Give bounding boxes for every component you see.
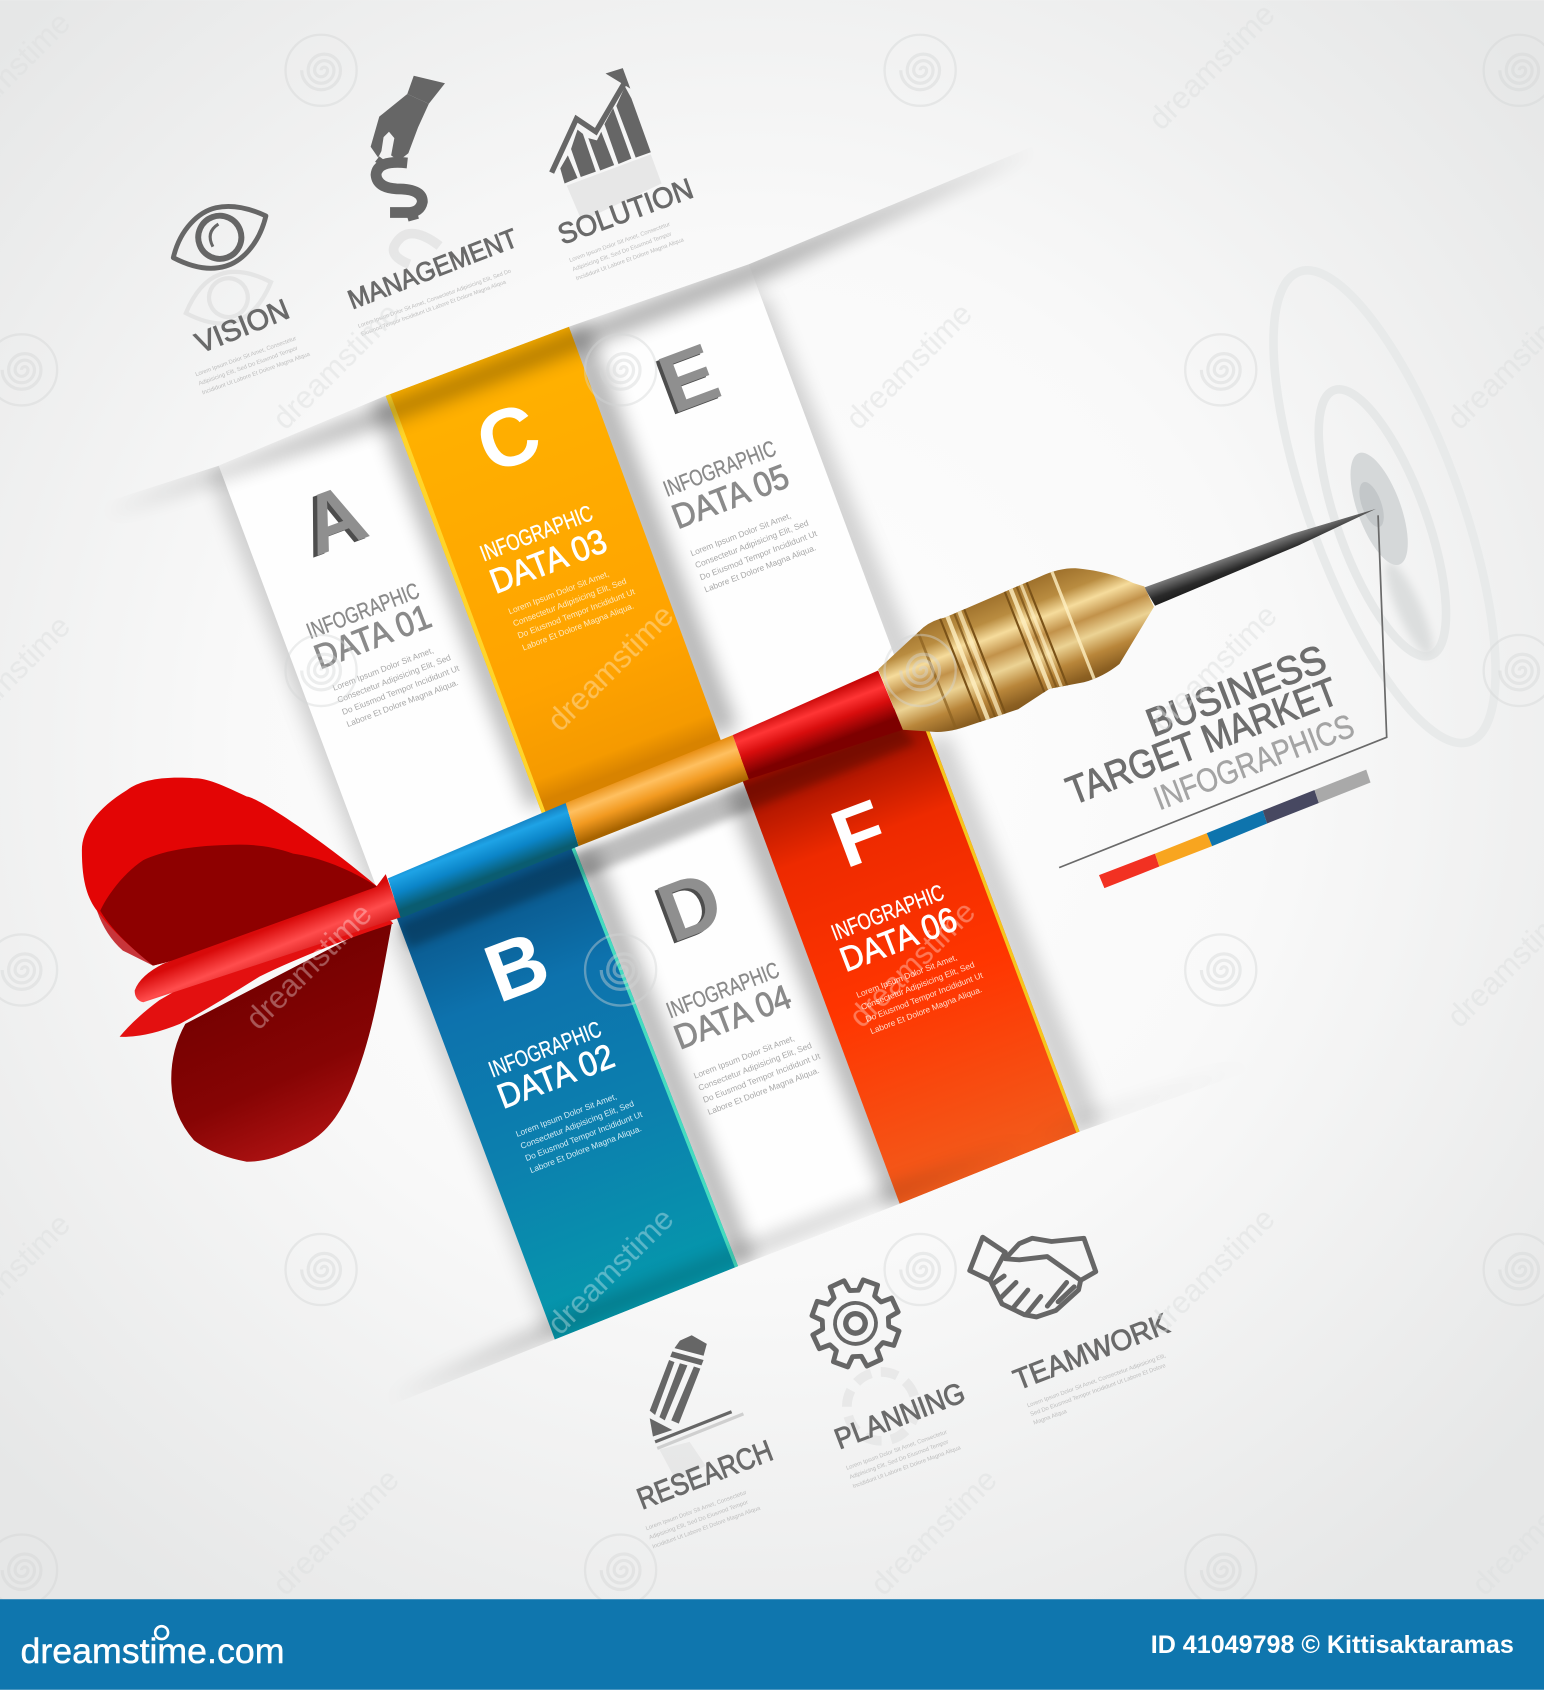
- gear reflection: [847, 1372, 916, 1441]
- strip A text: [285, 465, 466, 729]
- gold barrel: [878, 568, 1154, 732]
- watermark text on colour: dreamstime: [239, 896, 379, 1036]
- leader line to target: [1059, 515, 1387, 868]
- watermark text on colour: dreamstime: [540, 1201, 681, 1341]
- label: management: MANAGEMENT: [344, 223, 521, 315]
- body text: Labore Et Dolore Magna Aliqua.: [869, 984, 983, 1036]
- dart: [82, 509, 1376, 1162]
- body text: Labore Et Dolore Magna Aliqua.: [703, 542, 817, 594]
- heading: infographic data 02: DATA 02: [492, 1037, 620, 1116]
- label: vision: [191, 294, 312, 396]
- body text: Lorem Ipsum Dolor Sit Amet,: [855, 952, 959, 1000]
- shaft: red: [733, 670, 903, 779]
- caption: Lorem Ipsum Dolor Sit Amet, Consectetur Adipisicing Elit,: [1027, 1353, 1167, 1409]
- footer logo text: dreamstime.com: [20, 1631, 284, 1671]
- watermark text on background: dreamstime: [1144, 598, 1284, 738]
- strip B text: [473, 914, 649, 1175]
- watermark text on colour: [239, 598, 982, 1341]
- flight: back sliver: [97, 911, 183, 966]
- strip F text: [820, 783, 989, 1036]
- label: planning: PLANNING: [830, 1377, 970, 1456]
- title block: [1059, 515, 1387, 888]
- caption: Incididunt Ut Labore Et Dolore Magna Aliqua: [575, 237, 686, 282]
- caption: Incididunt Ut Labore Et Dolore Magna Aliqua: [852, 1445, 962, 1490]
- caption: Lorem Ipsum Dolor Sit Amet, Consectetur Adipisicing Elit, Sed Do: [357, 269, 512, 330]
- dollar reflection: [394, 234, 440, 264]
- shaft: blue: [388, 803, 579, 918]
- white strip shadows on panel: [210, 291, 1101, 1336]
- label: research: [633, 1435, 777, 1550]
- heading: infographic data 02: INFOGRAPHIC: [485, 1017, 605, 1082]
- caption: Eiusmod Tempor Incididunt Ut Labore Et Dolore Magna Aliqua: [360, 279, 508, 338]
- heading: infographic data 06: INFOGRAPHIC: [828, 880, 947, 946]
- pencil reflection: [659, 1442, 706, 1482]
- needle: [1144, 509, 1376, 606]
- chart reflection: [567, 154, 662, 221]
- letter E: E: [645, 329, 728, 433]
- watermark text on background: dreamstime: [266, 1462, 406, 1602]
- target rings: [1228, 246, 1541, 767]
- caption: Adipisicing Elit, Sed Do Eiusmod Tempor: [648, 1500, 749, 1541]
- body text: Consectetur Adipisicing Elit, Sed: [519, 1098, 636, 1151]
- body text: Lorem Ipsum Dolor Sit Amet,: [514, 1091, 618, 1139]
- heading: infographic data 01: INFOGRAPHIC: [303, 578, 423, 644]
- heading: infographic data 05: INFOGRAPHIC: [660, 436, 779, 502]
- body text: Do Eiusmod Tempor Incididunt Ut: [701, 1051, 822, 1105]
- flight: upper heart dark fold: [100, 845, 379, 966]
- body text: Labore Et Dolore Magna Aliqua.: [345, 677, 460, 729]
- panel: strip B: [390, 830, 738, 1340]
- barrel grooves: [917, 572, 1096, 730]
- footer credit: ID 41049798 © Kittisaktaramas: [1151, 1632, 1514, 1659]
- caption: Magna Aliqua: [1033, 1409, 1069, 1427]
- heading: infographic data 03: INFOGRAPHIC: [477, 500, 596, 566]
- letter E: E: [648, 327, 731, 431]
- letter D: D: [647, 854, 734, 960]
- icon: eye: [162, 192, 279, 336]
- strip C text: [465, 385, 641, 653]
- watermark text on colour: dreamstime: [842, 894, 982, 1034]
- dart shadow on strips: [399, 724, 916, 948]
- watermark text on background: dreamstime: [839, 296, 979, 436]
- body text: Labore Et Dolore Magna Aliqua.: [528, 1123, 643, 1175]
- label: solution: [554, 173, 697, 282]
- watermark text on background: dreamstime: [1142, 1201, 1282, 1341]
- heading: infographic data 04: INFOGRAPHIC: [663, 957, 783, 1023]
- heading: infographic data 04: DATA 04: [669, 978, 796, 1057]
- top band shadow: [102, 149, 1034, 515]
- caption: Adipisicing Elit, Sed Do Eiusmod Tempor: [572, 232, 673, 273]
- caption: Lorem Ipsum Dolor Sit Amet, Consectetur: [195, 336, 297, 378]
- panel: strip A: [219, 396, 544, 889]
- caption: Adipisicing Elit, Sed Do Eiusmod Tempor: [849, 1439, 950, 1481]
- label: teamwork: TEAMWORK: [1009, 1308, 1174, 1397]
- body text: Labore Et Dolore Magna Aliqua.: [706, 1065, 821, 1117]
- panel: strip D: [566, 767, 900, 1266]
- title: business target market infographics: BUSINESS: [1140, 637, 1332, 746]
- bottom band shadow: [388, 1062, 1261, 1401]
- heading: infographic data 03: DATA 03: [485, 522, 612, 601]
- title: business target market infographics: TARGET MARKET: [1061, 670, 1344, 814]
- bottom band: [0, 948, 1544, 1599]
- strip E text: [645, 327, 824, 594]
- heading: infographic data 05: DATA 05: [667, 458, 794, 537]
- strip D text: [644, 854, 827, 1117]
- icon: handshake: [970, 1237, 1096, 1317]
- body text: Do Eiusmod Tempor Incididunt Ut: [524, 1109, 644, 1163]
- flight: lower feather: [120, 906, 393, 1037]
- body text: Lorem Ipsum Dolor Sit Amet,: [507, 569, 610, 616]
- body text: Do Eiusmod Tempor Incididunt Ut: [516, 586, 637, 640]
- body text: Lorem Ipsum Dolor Sit Amet,: [689, 510, 793, 558]
- icon: gear: [800, 1268, 916, 1441]
- panel: strip C: [386, 327, 724, 819]
- heading: infographic data 01: DATA 01: [309, 598, 437, 677]
- coloured strip side shadows: [372, 324, 914, 1266]
- label: planning: [830, 1377, 970, 1490]
- watermark text on background: dreamstime: [1142, 0, 1282, 137]
- panel: strip F: [735, 701, 1080, 1204]
- caption: Lorem Ipsum Dolor Sit Amet, Consectetur: [846, 1430, 948, 1472]
- icon: hand with dollar: [371, 76, 445, 264]
- heading: infographic data 06: DATA 06: [835, 901, 962, 980]
- caption: Sed Do Eiusmod Tempor Incididunt Ut Labore Et Dolore: [1030, 1363, 1167, 1418]
- flight: upper heart: [82, 778, 379, 966]
- watermark text on background: dreamstime: [266, 296, 406, 436]
- caption: Adipisicing Elit, Sed Do Eiusmod Tempor: [198, 346, 299, 387]
- icon: pencil: [650, 1335, 743, 1482]
- letter D: D: [644, 856, 731, 962]
- icon: rising chart: [552, 68, 662, 221]
- label: solution: SOLUTION: [554, 173, 697, 251]
- body text: Do Eiusmod Tempor Incididunt Ut: [698, 528, 819, 582]
- caption: Incididunt Ut Labore Et Dolore Magna Aliqua: [652, 1505, 762, 1550]
- title: business target market infographics: INFOGRAPHICS: [1149, 708, 1359, 818]
- caption: Lorem Ipsum Dolor Sit Amet, Consectetur: [645, 1490, 748, 1532]
- body text: Consectetur Adipisicing Elit, Sed: [697, 1040, 813, 1093]
- letter F: F: [820, 783, 899, 886]
- top band: [0, 0, 1207, 539]
- body text: Lorem Ipsum Dolor Sit Amet,: [692, 1033, 796, 1081]
- body text: Consectetur Adipisicing Elit, Sed: [859, 959, 976, 1012]
- body text: Do Eiusmod Tempor Incididunt Ut: [864, 970, 985, 1024]
- letter A: A: [285, 467, 374, 575]
- body text: Consectetur Adipisicing Elit, Sed: [336, 652, 452, 705]
- caption: Lorem Ipsum Dolor Sit Amet, Consectetur: [569, 222, 671, 264]
- body text: Consectetur Adipisicing Elit, Sed: [693, 517, 810, 570]
- watermark text on background: dreamstime: [864, 1462, 1004, 1602]
- flight: tube: [135, 874, 401, 1002]
- icon: logo spiral: [155, 1626, 168, 1639]
- footer bar: [0, 1599, 1544, 1690]
- body text: Labore Et Dolore Magna Aliqua.: [521, 601, 635, 653]
- label: research: RESEARCH: [633, 1435, 777, 1516]
- watermark text on colour: dreamstime: [540, 598, 681, 738]
- body text: Consectetur Adipisicing Elit, Sed: [511, 576, 628, 628]
- shaft: orange: [566, 735, 749, 846]
- letter A: A: [289, 465, 378, 573]
- letter B: B: [473, 914, 561, 1020]
- colour bar: [1099, 770, 1371, 888]
- body text: Lorem Ipsum Dolor Sit Amet,: [331, 645, 435, 693]
- flight: lower heart: [171, 921, 392, 1162]
- panel: strip E: [569, 264, 905, 749]
- eye reflection: [177, 259, 279, 336]
- caption: Incididunt Ut Labore Et Dolore Magna Aliqua: [201, 351, 312, 396]
- body text: Do Eiusmod Tempor Incididunt Ut: [340, 663, 461, 717]
- letter C: C: [465, 385, 552, 491]
- label: vision: VISION: [191, 294, 294, 360]
